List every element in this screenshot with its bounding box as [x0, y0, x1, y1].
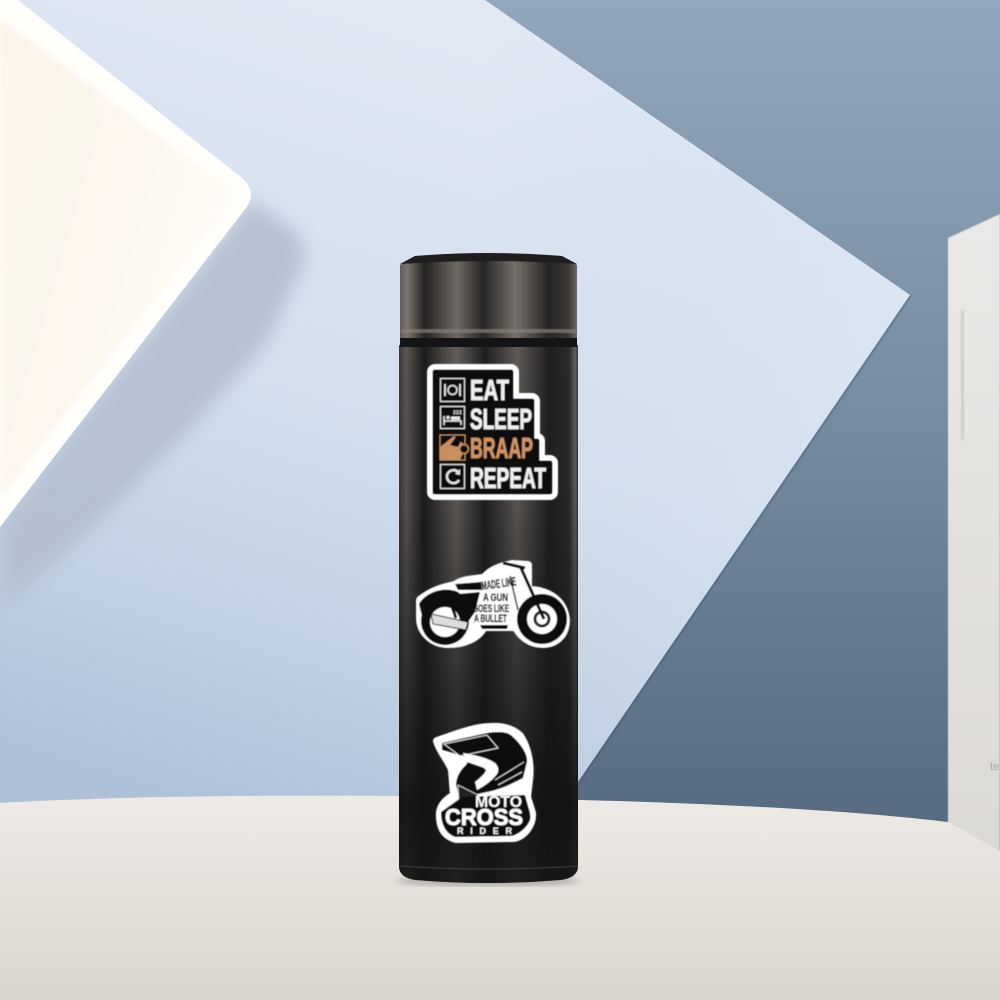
sticker text: BRAAP	[470, 433, 533, 465]
bottle shadow on table	[396, 876, 580, 886]
rear wheel and fender	[419, 590, 469, 645]
bottle	[399, 253, 578, 883]
bottle body	[399, 345, 578, 883]
frame and fork	[503, 563, 544, 619]
sticker text: EAT	[470, 375, 509, 407]
front wheel	[517, 594, 567, 644]
sticker text: SLEEP	[470, 404, 532, 436]
label text	[445, 794, 523, 836]
sticker text	[470, 375, 546, 495]
sticker: moto cross rider helmet	[437, 727, 532, 839]
black label backing	[441, 795, 530, 837]
label text: CROSS	[445, 804, 523, 830]
sticker: motorcycle	[419, 563, 567, 645]
icon: plate and cutlery	[440, 378, 464, 402]
bottle lid	[400, 253, 577, 347]
book at right	[948, 214, 1000, 852]
lettering on bike: MADE LIKE	[480, 574, 517, 593]
lettering on bike: GOES LIKE	[473, 603, 509, 615]
table surface	[0, 796, 1000, 1000]
label text: RIDER	[457, 826, 512, 836]
lettering on bike: A GUN	[483, 592, 508, 604]
shadow of white panel	[0, 200, 305, 610]
lettering on bike: A BULLET	[474, 613, 507, 625]
icon: bed: zzz	[453, 410, 462, 416]
sticker: eat sleep braap repeat	[435, 372, 550, 495]
helmet shape	[442, 732, 527, 810]
seat and engine	[455, 582, 508, 629]
icon: repeat arrow	[440, 464, 464, 488]
light blue angled panel	[0, 0, 910, 830]
sticker text: REPEAT	[470, 463, 546, 495]
icon: dirt bike	[440, 435, 468, 460]
book at right: te	[990, 761, 999, 773]
white angled panel	[0, 0, 251, 527]
label text: MOTO	[475, 794, 522, 811]
lettering on bike	[473, 574, 517, 625]
